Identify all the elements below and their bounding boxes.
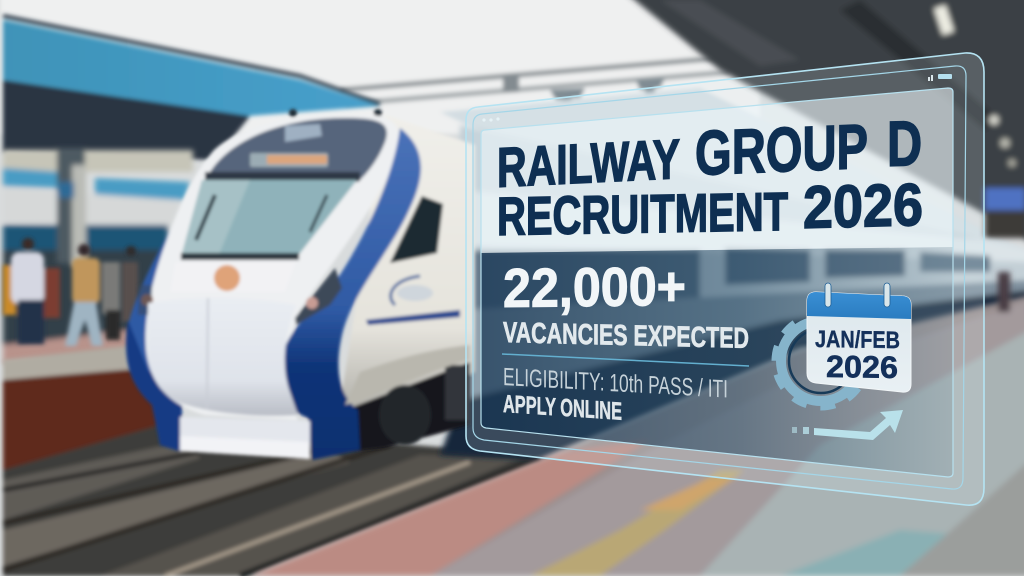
title: RAILWAY bbox=[497, 127, 680, 199]
emblem bbox=[214, 265, 240, 291]
content frame bbox=[481, 88, 953, 477]
underframe bbox=[345, 362, 470, 452]
icon: calendar bbox=[807, 283, 911, 392]
calendar year: 2026 bbox=[826, 349, 898, 385]
panel glass fill bbox=[466, 53, 984, 505]
calendar month: JAN/FEB bbox=[815, 326, 900, 354]
nose white frame bbox=[146, 115, 400, 420]
panel lower dark section bbox=[481, 247, 953, 477]
window dots bbox=[482, 117, 500, 122]
eligibility text: ELIGIBILITY: 10th PASS / ITI bbox=[503, 363, 728, 404]
vacancies count: 22,000+ bbox=[503, 255, 686, 319]
side stripe and logo bbox=[366, 310, 460, 325]
train side body bbox=[340, 115, 475, 420]
arrow bbox=[792, 410, 903, 440]
vacancies label: VACANCIES EXPECTED bbox=[503, 317, 749, 355]
people on platform bbox=[3, 238, 138, 346]
roof knobs bbox=[289, 109, 297, 117]
title bbox=[497, 109, 923, 247]
blue outer edge bbox=[126, 195, 190, 452]
panel upper glass header bbox=[481, 88, 953, 253]
glass panel bbox=[466, 53, 984, 505]
blue livery band bbox=[280, 128, 421, 460]
divider line bbox=[502, 354, 749, 366]
windscreen bbox=[181, 180, 357, 257]
apply online text: APPLY ONLINE bbox=[503, 390, 622, 426]
ceiling bbox=[0, 0, 1024, 280]
dark right canopy bbox=[625, 0, 1024, 245]
left canopy bbox=[3, 16, 380, 160]
far train carriages behind panel bbox=[440, 125, 1024, 460]
platform right bbox=[250, 272, 1024, 576]
lower body shadow bbox=[345, 345, 470, 405]
upper nose panel bbox=[170, 262, 296, 292]
title: 2026 bbox=[803, 171, 923, 241]
train front bbox=[126, 109, 475, 460]
status icons bbox=[928, 74, 952, 81]
inner frame bbox=[473, 66, 966, 489]
panel outlines bbox=[466, 53, 984, 505]
platform edge and tracks bbox=[3, 345, 540, 576]
title: GROUP bbox=[695, 112, 868, 189]
side window bbox=[390, 196, 443, 263]
left background bbox=[3, 148, 193, 364]
cab roof glass bbox=[210, 118, 387, 182]
title: D bbox=[887, 109, 922, 181]
skirt bbox=[180, 417, 310, 459]
icon: gear bbox=[775, 315, 867, 407]
headlights bbox=[295, 268, 342, 325]
title: RECRUITMENT bbox=[497, 182, 788, 247]
lower nose bbox=[148, 298, 298, 416]
